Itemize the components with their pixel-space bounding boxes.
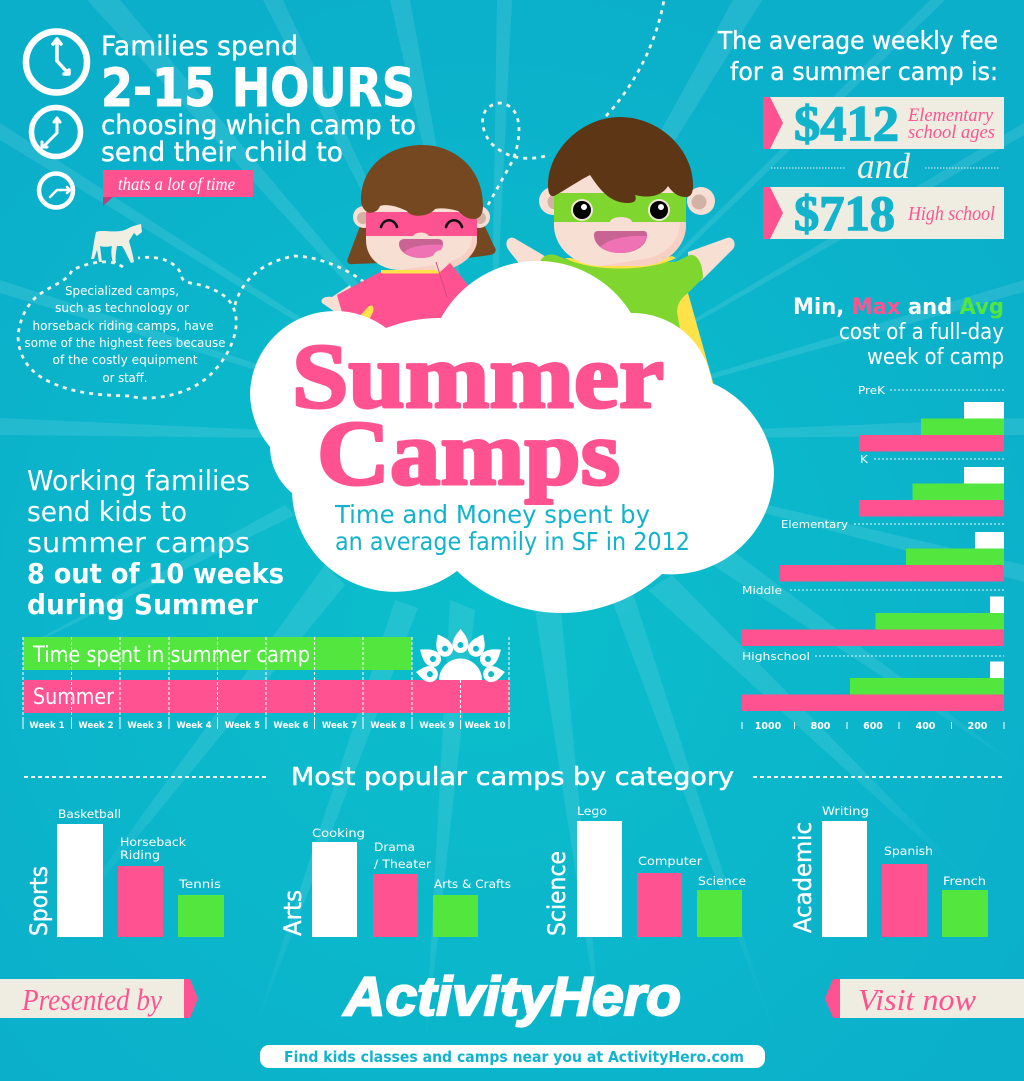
specialized camps note: horseback riding camps, have — [32, 319, 214, 333]
subtitle — [334, 500, 690, 556]
and divider: and — [857, 146, 911, 186]
min max avg heading: Min, Max and Avg — [793, 295, 1004, 320]
Middle bars — [742, 596, 1004, 646]
group labels — [742, 384, 886, 663]
hours headline: 2-15 HOURS — [101, 58, 415, 119]
chart: academic camps: Spanish — [884, 844, 933, 858]
average weekly fee heading: for a summer camp is: — [730, 57, 998, 86]
chart: arts camps: Drama — [374, 840, 415, 854]
character: boy — [506, 117, 735, 400]
time in camp bar — [23, 637, 412, 670]
group labels: PreK — [858, 384, 886, 397]
week axis: Week 6 — [273, 721, 309, 731]
chart: sports camps: Tennis — [178, 877, 221, 891]
cost axis — [742, 721, 1004, 732]
icon: horse — [91, 224, 142, 263]
ribbon: visit now — [825, 979, 1024, 1018]
chart: academic camps: Writing — [822, 804, 869, 818]
title: Camps — [317, 402, 620, 504]
cape — [677, 293, 718, 400]
chart: sports camps: Riding — [120, 848, 160, 862]
hours headline: choosing which camp to — [101, 110, 416, 141]
chart: academic camps — [789, 804, 988, 937]
cost axis: 600 — [863, 721, 883, 732]
ribbon: $412 elementary: $412 — [794, 95, 899, 151]
week axis: Week 9 — [419, 721, 455, 731]
chart: science camps: Science — [543, 851, 571, 936]
working families text: 8 out of 10 weeks — [27, 557, 284, 590]
chart: academic camps: French — [943, 874, 986, 888]
week axis: Week 2 — [78, 721, 114, 731]
cost axis: 800 — [811, 721, 831, 732]
icon: large clock — [26, 32, 87, 92]
head — [554, 170, 686, 266]
week axis: Week 8 — [370, 721, 406, 731]
ribbon: $412 elementary — [763, 95, 1004, 151]
arms — [506, 238, 560, 270]
eyes — [571, 199, 593, 221]
group labels: Middle — [742, 584, 782, 597]
chart: arts camps: Arts & Crafts — [434, 877, 511, 891]
clock icons — [26, 32, 87, 208]
mouth — [399, 239, 443, 258]
mask — [366, 212, 477, 236]
tag: thats a lot of time: thats a lot of time — [118, 174, 235, 194]
nose — [610, 217, 632, 227]
ribbon: visit now: Visit now — [858, 982, 976, 1017]
chart: arts camps: Arts — [279, 890, 307, 936]
specialized camps note: of the costly equipment — [52, 353, 198, 367]
ears — [539, 187, 567, 215]
tag: thats a lot of time — [103, 170, 253, 206]
week axis: Week 7 — [322, 721, 357, 731]
hours headline — [101, 31, 416, 168]
subtitle: Time and Money spent by — [334, 500, 650, 529]
week axis — [23, 720, 509, 731]
chart: arts camps: / Theater — [374, 857, 431, 871]
icon: small clock — [39, 174, 73, 208]
timeline chart: weeks of summer — [23, 629, 509, 731]
chart: sports camps: Horseback — [120, 835, 186, 849]
working families text: send kids to — [27, 495, 187, 528]
group labels: K — [860, 453, 869, 466]
icon: medium clock — [32, 108, 80, 156]
PreK bars — [859, 402, 1004, 452]
chart: academic camps: Academic — [789, 822, 817, 933]
subtitle: an average family in SF in 2012 — [335, 527, 690, 556]
cost axis: 1000 — [755, 721, 782, 732]
central cloud — [250, 261, 774, 613]
chart: sports camps: Sports — [25, 866, 53, 936]
week axis: Week 1 — [29, 721, 65, 731]
chart: arts camps — [279, 826, 511, 937]
ears — [353, 206, 375, 228]
ribbon: $718 high school: High school — [907, 203, 995, 225]
specialized camps note — [24, 284, 226, 385]
time in camp bar: Time spent in summer camp — [32, 643, 310, 668]
specialized camps note: such as technology or — [55, 301, 189, 315]
chart: sports camps: Basketball — [58, 807, 121, 821]
K bars — [859, 467, 1004, 516]
week axis: Week 4 — [176, 721, 212, 731]
ribbon: presented by: Presented by — [21, 982, 162, 1017]
chart: arts camps: Cooking — [312, 826, 365, 840]
character: girl — [322, 145, 496, 340]
bar chart: cost of camp — [742, 384, 1004, 732]
min max avg heading: week of camp — [867, 345, 1004, 370]
body — [337, 263, 472, 340]
week axis: Week 3 — [127, 721, 163, 731]
icon: sun — [415, 629, 506, 683]
chart: science camps: Computer — [638, 854, 702, 868]
ribbon: $718 high school: $718 — [794, 185, 895, 241]
chart: science camps — [543, 804, 746, 937]
happy eyes — [381, 220, 462, 227]
nose — [413, 232, 429, 242]
back hair — [347, 205, 496, 264]
chart: science camps: Science — [698, 874, 746, 888]
week axis: Week 5 — [225, 721, 260, 731]
week axis: Week 10 — [464, 721, 506, 731]
title: Summer — [292, 325, 664, 427]
heading: most popular camps: Most popular camps by category — [291, 762, 734, 791]
body — [540, 255, 703, 340]
group labels: Elementary — [781, 518, 849, 531]
footer call to action: Find kids classes and camps near you at ActivityHero.com — [284, 1048, 744, 1066]
logo: ActivityHero: ActivityHero — [342, 965, 681, 1027]
arm — [322, 285, 362, 320]
ribbon: $412 elementary: Elementary — [907, 105, 994, 126]
ribbon: $718 high school — [763, 185, 1004, 241]
summer bar — [23, 680, 509, 713]
ribbon: $412 elementary: school ages — [908, 122, 995, 143]
specialized camps note: Specialized camps, — [65, 284, 179, 298]
dashed flight paths — [18, 0, 664, 398]
specialized camps note: some of the highest fees because — [24, 336, 226, 350]
working families text — [27, 464, 284, 621]
mouth — [594, 231, 647, 253]
hair — [548, 117, 693, 203]
min max avg heading — [793, 295, 1004, 370]
mask — [554, 193, 686, 222]
working families text: summer camps — [27, 526, 250, 559]
average weekly fee heading: The average weekly fee — [717, 26, 998, 55]
Highschool bars — [742, 662, 1004, 711]
cost axis: 200 — [968, 721, 988, 732]
working families text: Working families — [27, 464, 250, 497]
Elementary bars — [780, 532, 1004, 582]
specialized camps note: or staff. — [102, 371, 148, 385]
summer bar: Summer — [33, 685, 115, 710]
head — [366, 190, 477, 270]
group labels: Highschool — [742, 650, 810, 663]
cost axis: 400 — [916, 721, 936, 732]
hours headline: send their child to — [101, 137, 343, 168]
chart: sports camps — [25, 807, 224, 937]
title — [292, 325, 664, 504]
average weekly fee heading — [717, 26, 998, 86]
chart: science camps: Lego — [577, 804, 607, 818]
finger and sleeve — [433, 250, 450, 272]
hair — [361, 145, 483, 219]
working families text: during Summer — [27, 588, 258, 621]
min max avg heading: cost of a full-day — [839, 320, 1004, 345]
hours headline: Families spend — [101, 31, 298, 62]
